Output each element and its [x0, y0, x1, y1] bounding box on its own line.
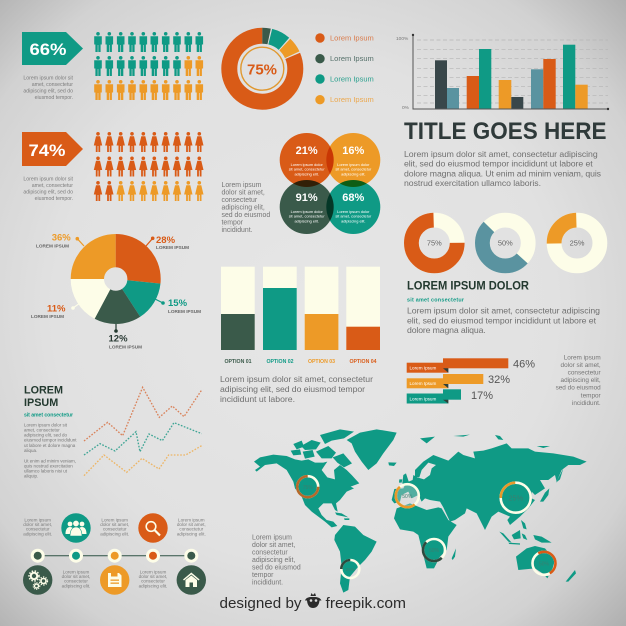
- legend: donut categories: Lorem Ipsum: [330, 54, 374, 63]
- map markers: 50%: [539, 562, 550, 568]
- text block: 66% description: adipiscing elit, sed do: [23, 88, 73, 94]
- chart: pie with labels: LOREM IPSUM: [168, 309, 201, 314]
- text block: map note: tempor: [252, 572, 274, 579]
- text block: venn note: tempor: [222, 220, 244, 227]
- venn labels: sit amet, consectetur: [335, 167, 372, 172]
- world map: [254, 429, 587, 593]
- chart: three progress donuts: 75%: [427, 239, 442, 248]
- text block: timeline captions: adipiscing elit.: [139, 583, 167, 588]
- chart: pie with labels: LOREM IPSUM: [31, 314, 64, 319]
- arrow badge: 74%: 74%: [28, 141, 66, 160]
- text block: map note: incididunt.: [252, 580, 283, 587]
- text block: venn note: dolor sit amet,: [222, 190, 265, 196]
- text block: intro paragraph: elit, sed do eiusmod tempor incididunt ut labore et: [404, 159, 593, 169]
- text block: bars note: incididunt.: [572, 400, 601, 407]
- text block: bars note: adipiscing elit,: [561, 377, 601, 384]
- text block: left lines note: quis nostrud exercitation: [24, 463, 73, 468]
- text block: venn note: [222, 182, 270, 234]
- chart: option bars: OPTION 02: [266, 359, 294, 365]
- chart: column chart: [396, 34, 609, 111]
- subheading: left sit amet: sit amet consectetur: [24, 412, 73, 418]
- text block: map note: [252, 534, 301, 587]
- venn labels: Lorem ipsum dolor: [291, 162, 324, 167]
- text block: left lines note: [24, 422, 77, 479]
- venn labels: sit amet, consectetur: [289, 214, 325, 219]
- text block: venn note: Lorem ipsum: [222, 182, 262, 189]
- chart: option bars: OPTION 03: [308, 359, 335, 365]
- text block: timeline captions: consectetur: [64, 579, 88, 584]
- text block: 66% description: amet, consectetur: [32, 82, 73, 88]
- text block: timeline captions: consectetur: [141, 579, 165, 584]
- legend: donut categories: Lorem Ipsum: [330, 34, 374, 42]
- text block: 74% description: amet, consectetur: [32, 183, 73, 189]
- venn labels: adipiscing elit.: [294, 171, 319, 176]
- text block: timeline captions: Lorem ipsum: [140, 569, 166, 574]
- legend: donut categories: Lorem Ipsum: [330, 95, 374, 104]
- chart: tagged horizontal bars: Lorem Ipsum: [410, 381, 436, 386]
- text block: right paragraph: [407, 306, 600, 335]
- text block: right paragraph: dolore magna aliqua.: [407, 325, 486, 335]
- text block: option bars paragraph: Lorem ipsum dolor sit amet, consectetur: [220, 374, 373, 384]
- text block: venn note: adipiscing elit,: [222, 205, 265, 212]
- icon: home: [177, 565, 206, 595]
- chart: three progress donuts: [411, 220, 600, 266]
- text block: bars note: Lorem ipsum: [564, 354, 601, 362]
- chart: option bars: [221, 267, 380, 365]
- text block: timeline captions: Lorem ipsum: [24, 517, 51, 522]
- venn labels: adipiscing elit.: [341, 171, 366, 176]
- text block: timeline captions: dolor sit amet,: [177, 522, 206, 527]
- venn labels: sit amet, consectetur: [335, 214, 372, 219]
- text block: left lines note: aliqua.: [24, 448, 37, 453]
- chart: tagged horizontal bars: [407, 358, 535, 404]
- venn labels: Lorem ipsum dolor: [337, 162, 370, 167]
- text block: map note: consectetur: [252, 550, 288, 557]
- legend: donut categories: [315, 33, 374, 104]
- icon: magnifier: [138, 513, 168, 543]
- text block: timeline captions: dolor sit amet,: [23, 522, 52, 527]
- arrow badge: 74%: [22, 132, 83, 166]
- chart: pie with labels: LOREM IPSUM: [36, 244, 69, 249]
- pictogram: male figures: [94, 32, 203, 100]
- text block: 66% description: [23, 76, 74, 101]
- chart: tagged horizontal bars: 46%: [513, 359, 535, 371]
- text block: left lines note: aliquip.: [24, 474, 38, 479]
- text block: 74% description: adipiscing elit, sed do: [23, 190, 73, 196]
- text block: right paragraph: Lorem ipsum dolor sit amet, consectetur adipiscing: [407, 306, 600, 316]
- chart: tagged horizontal bars: Lorem Ipsum: [410, 396, 436, 401]
- text block: right paragraph: elit, sed do eiusmod tempor incididunt ut labore et: [407, 315, 597, 325]
- footer: freepik credit: [220, 593, 406, 612]
- chart: three progress donuts: 25%: [570, 239, 585, 248]
- venn labels: Lorem ipsum dolor: [337, 209, 370, 214]
- venn labels: adipiscing elit.: [341, 218, 366, 223]
- footer: freepik credit: designed by: [220, 596, 302, 612]
- chart: column chart: 100%: [396, 36, 409, 42]
- chart: tagged horizontal bars: 17%: [471, 390, 493, 402]
- chart: 75% segmented donut: 75%: [247, 62, 277, 78]
- map markers: 50%: [402, 494, 413, 500]
- venn labels: 68%: [342, 192, 365, 204]
- text block: timeline captions: adipiscing elit.: [177, 531, 206, 536]
- chart: tagged horizontal bars: Lorem Ipsum: [410, 366, 436, 370]
- chart: option bars: OPTION 01: [224, 359, 252, 365]
- text block: timeline captions: Lorem ipsum: [63, 569, 89, 574]
- text block: timeline captions: dolor sit amet,: [62, 574, 90, 579]
- text block: bars note: dolor sit amet,: [561, 362, 601, 369]
- text block: left lines note: amet, consectetur: [24, 428, 60, 432]
- text block: timeline captions: consectetur: [179, 527, 204, 532]
- subheading: sit amet consectetur: sit amet consectetur: [407, 298, 465, 304]
- text block: timeline captions: dolor sit amet,: [139, 574, 167, 579]
- icon: people: [61, 513, 91, 543]
- text block: venn note: sed do eiusmod: [222, 212, 270, 219]
- icon: gears: [23, 565, 52, 595]
- venn labels: [289, 145, 372, 223]
- text block: timeline captions: consectetur: [103, 527, 127, 532]
- text block: option bars paragraph: adipiscing elit, sed do eiusmod tempor: [220, 384, 365, 394]
- chart: tagged horizontal bars: 32%: [488, 374, 510, 386]
- text block: 74% description: Lorem ipsum dolor sit: [23, 176, 74, 182]
- chart: pie with labels: LOREM IPSUM: [156, 245, 189, 250]
- chart: pie with labels: 11%: [47, 304, 66, 315]
- text block: timeline captions: adipiscing elit.: [100, 531, 129, 536]
- panel: 74% people stat: [22, 132, 204, 202]
- text block: map note: adipiscing elit,: [252, 557, 295, 564]
- footer: freepik credit: freepik.com: [326, 596, 406, 612]
- venn labels: sit amet, consectetur: [289, 167, 325, 172]
- text block: map note: Lorem ipsum: [252, 534, 292, 542]
- text block: timeline captions: [23, 517, 206, 588]
- panel: 66% people stat: [22, 32, 203, 101]
- chart: pie with labels: 36%: [52, 233, 71, 244]
- chart: three progress donuts: 50%: [498, 239, 513, 248]
- chart: column chart: 0%: [402, 105, 410, 111]
- text block: bars note: consectetur: [568, 370, 602, 377]
- heading: lorem ipsum left: [24, 384, 63, 409]
- arrow badge: 66%: [22, 32, 83, 65]
- text block: 74% description: eiusmod tempor.: [35, 196, 73, 202]
- text block: left lines note: eiusmod tempor incididunt: [24, 438, 77, 443]
- icon: floppy disk: [100, 565, 129, 595]
- venn labels: 21%: [296, 145, 318, 157]
- text block: bars note: tempor: [581, 392, 602, 399]
- text block: left lines note: ut labore et dolore magna: [24, 443, 76, 448]
- text block: left lines note: adipiscing elit, sed do: [24, 433, 68, 438]
- map markers: 25%: [346, 567, 355, 572]
- text block: left lines note: ullamco laboris nisi ut: [24, 469, 68, 474]
- chart: pie with labels: LOREM IPSUM: [109, 344, 142, 350]
- timeline: [23, 513, 206, 595]
- arrow badge: 66%: 66%: [30, 40, 66, 59]
- text block: left lines note: Lorem ipsum dolor sit: [24, 422, 68, 427]
- text block: intro paragraph: dolore magna aliqua. Ut enim ad minim veniam, quis: [404, 168, 602, 178]
- text block: timeline captions: adipiscing elit.: [23, 531, 52, 536]
- text block: venn note: incididunt.: [222, 227, 253, 234]
- text block: 66% description: eiusmod tempor.: [35, 95, 73, 101]
- text block: 74% description: [23, 176, 74, 202]
- map markers: 50%: [429, 548, 440, 554]
- text block: intro paragraph: Lorem ipsum dolor sit amet, consectetur adipiscing: [404, 149, 598, 159]
- text block: left lines note: Ut enim ad minim veniam,: [24, 458, 76, 463]
- text block: timeline captions: Lorem ipsum: [178, 517, 205, 522]
- pictogram: female figures: [94, 132, 204, 201]
- text block: map note: sed do eiusmod: [252, 564, 301, 572]
- venn labels: Lorem ipsum dolor: [291, 209, 324, 214]
- venn labels: 91%: [296, 192, 318, 204]
- map markers: 25%: [508, 494, 524, 502]
- chart: pie with labels: [31, 233, 201, 350]
- text block: timeline captions: Lorem ipsum: [101, 517, 128, 522]
- text block: option bars paragraph: incididunt ut labore.: [220, 394, 295, 404]
- title: TITLE GOES HERE: [404, 118, 606, 145]
- map markers: 75%: [303, 485, 313, 491]
- map markers: [297, 476, 556, 578]
- chart: option bars: OPTION 04: [349, 359, 377, 365]
- chart: dotted line graph: [84, 387, 202, 476]
- chart: pie with labels: 12%: [108, 334, 128, 345]
- text block: bars note: sed do eiusmod: [556, 385, 601, 392]
- chart: pie with labels: 15%: [168, 298, 188, 309]
- chart: venn circles: [280, 133, 380, 234]
- text block: intro paragraph: [404, 149, 602, 188]
- heading: lorem ipsum dolor: LOREM IPSUM DOLOR: [407, 280, 530, 292]
- text block: bars note: [556, 354, 602, 407]
- chart: 75% segmented donut: [229, 36, 295, 102]
- text block: map note: dolor sit amet,: [252, 542, 295, 549]
- chart: pie with labels: 28%: [156, 235, 176, 246]
- heading: lorem ipsum left: IPSUM: [24, 397, 58, 409]
- heading: lorem ipsum left: LOREM: [24, 384, 63, 396]
- legend: donut categories: Lorem Ipsum: [330, 74, 374, 84]
- text block: timeline captions: consectetur: [26, 527, 50, 532]
- text block: option bars paragraph: [220, 374, 373, 404]
- venn labels: adipiscing elit.: [294, 218, 319, 223]
- text block: timeline captions: dolor sit amet,: [100, 522, 129, 527]
- text block: timeline captions: adipiscing elit.: [62, 583, 90, 588]
- venn labels: 16%: [342, 145, 365, 157]
- text block: venn note: consectetur: [222, 197, 258, 204]
- text block: 66% description: Lorem ipsum dolor sit: [23, 76, 74, 82]
- text block: intro paragraph: nostrud exercitation ullamco laboris.: [404, 178, 541, 188]
